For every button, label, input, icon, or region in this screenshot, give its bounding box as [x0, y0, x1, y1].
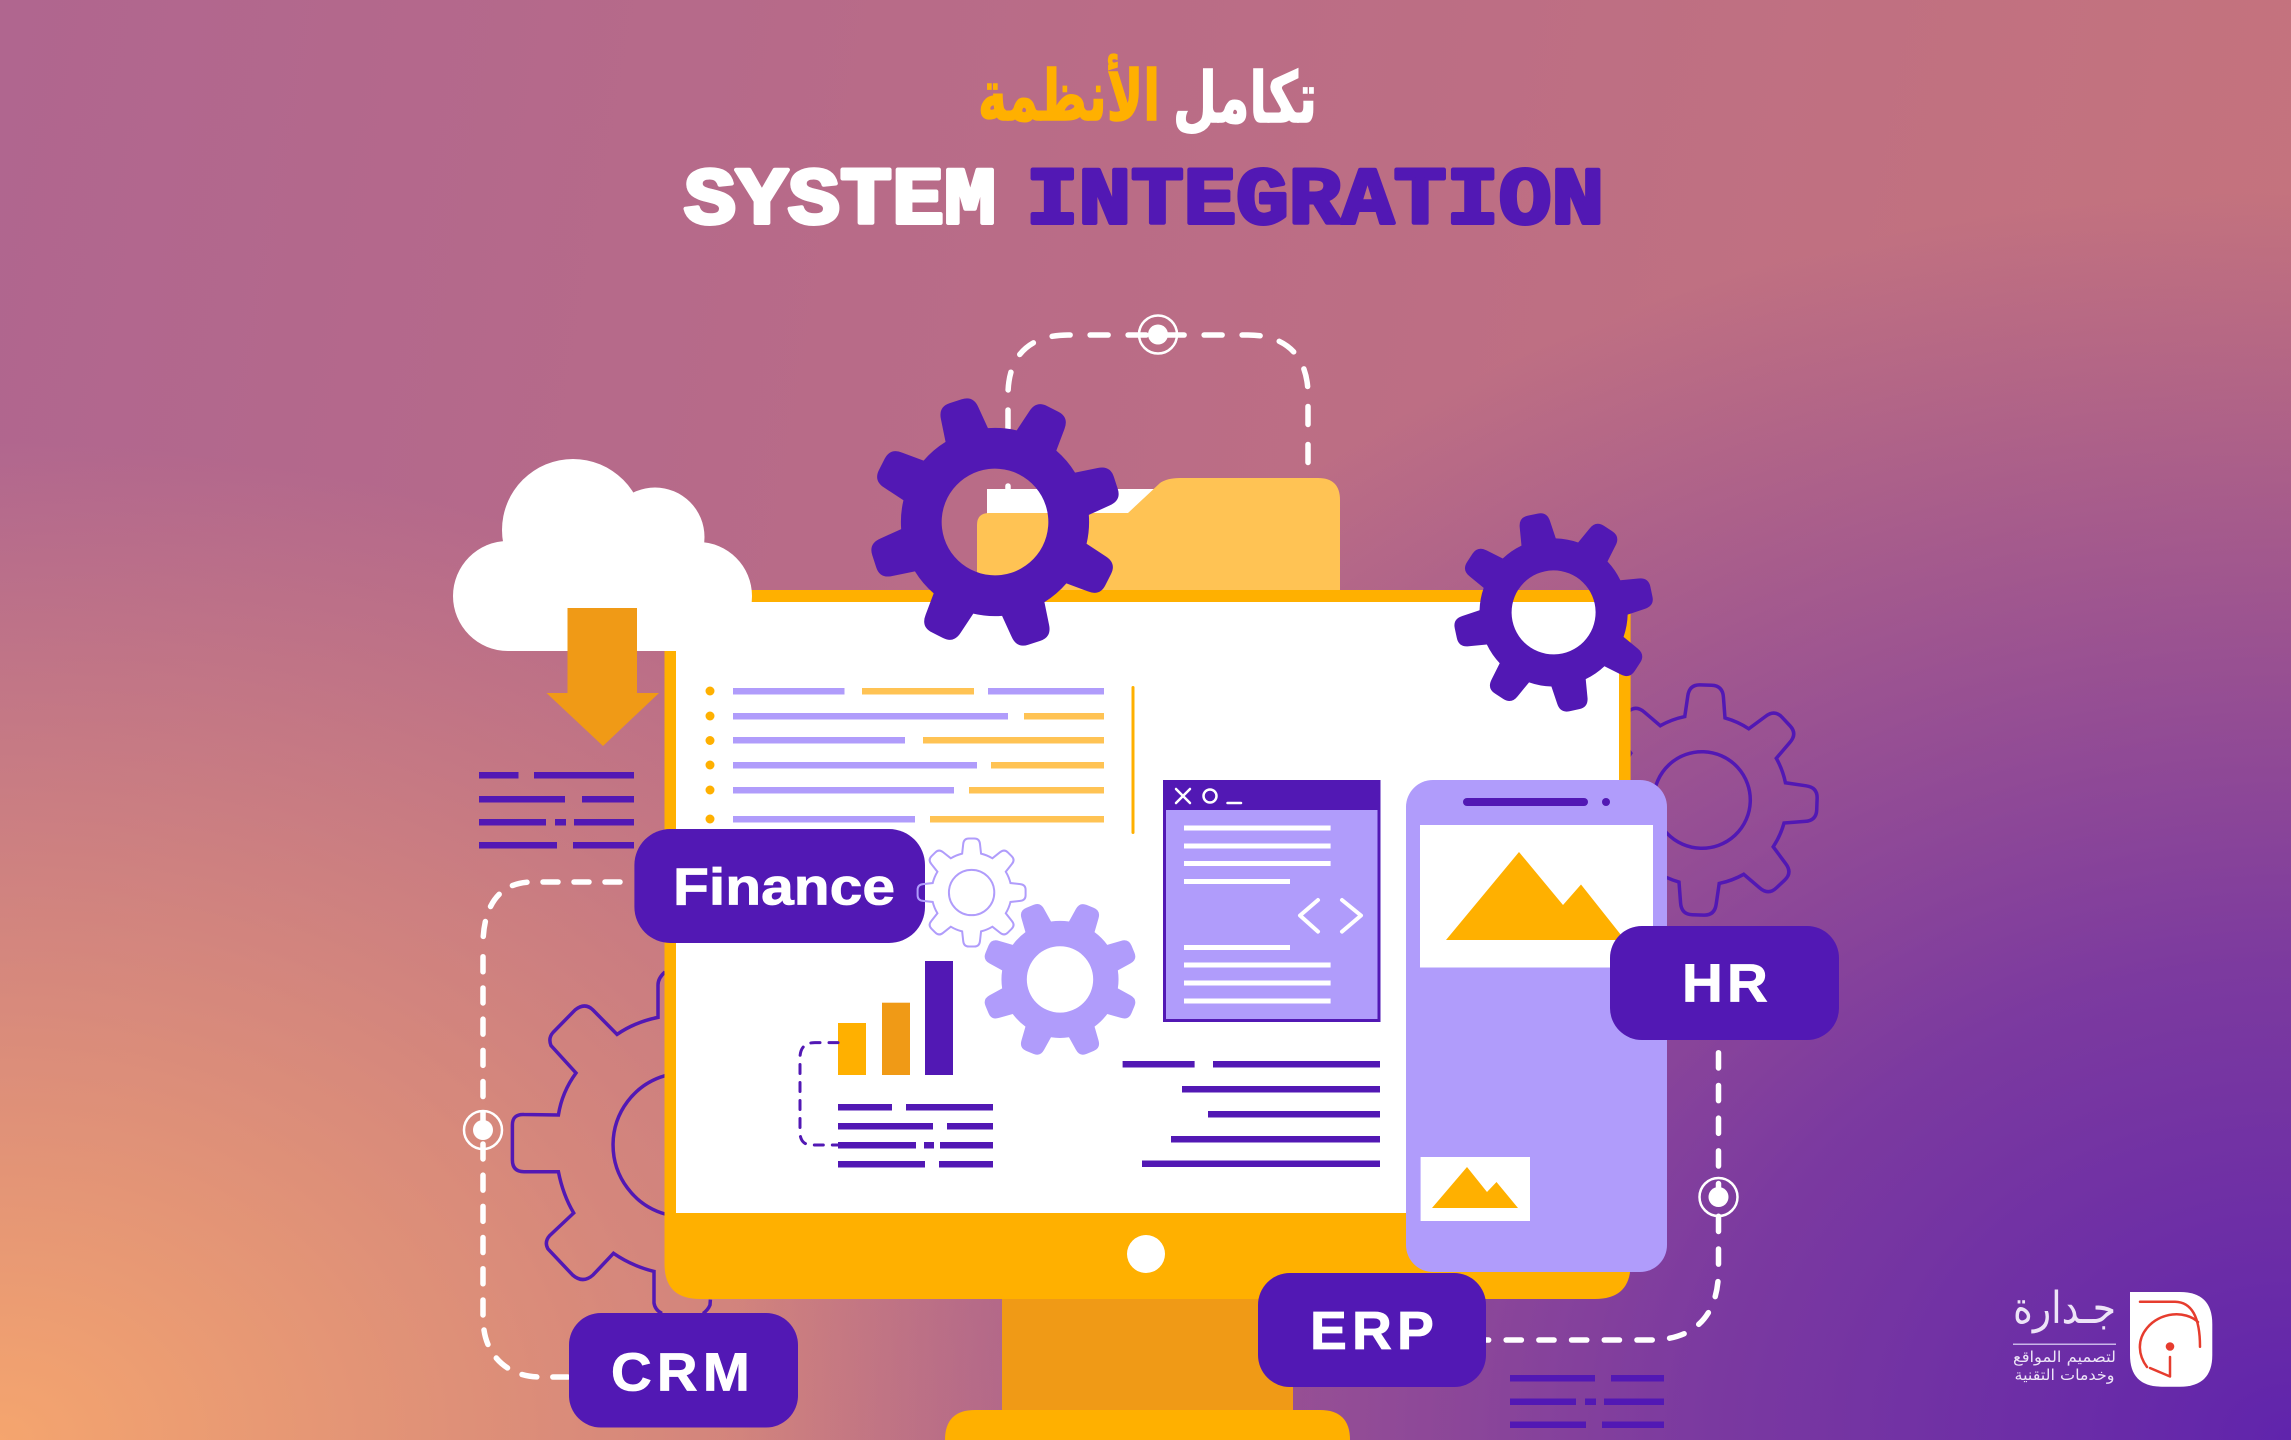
connector node: right: [1700, 1178, 1738, 1216]
logo mark: [2130, 1292, 2212, 1387]
download arrow: [546, 608, 659, 746]
bar chart: [800, 961, 993, 1168]
cloud: [453, 459, 752, 651]
label: CRM: [569, 1313, 798, 1428]
label: Finance: Finance: [673, 858, 895, 916]
english title: [684, 157, 1604, 248]
phone camera: [1602, 798, 1610, 806]
logo text: لتصميم المواقع: [2013, 1348, 2116, 1366]
dashed connector: hr to erp: [1486, 1053, 1718, 1340]
icon: outline gear left: [512, 972, 710, 1314]
dashed connector: top: [1008, 335, 1308, 489]
label: ERP: [1258, 1273, 1486, 1387]
bottom right text lines: [1510, 1375, 1664, 1428]
folder: [977, 478, 1340, 590]
phone small image: [1421, 1157, 1530, 1221]
monitor button: [1127, 1235, 1165, 1273]
title: [684, 54, 1604, 248]
phone speaker: [1463, 798, 1588, 806]
code window: [1163, 780, 1380, 1020]
dashed connector: finance to crm: [483, 882, 620, 1377]
label: HR: HR: [1682, 954, 1772, 1014]
english title: INTEGRATION: [1026, 157, 1604, 248]
logo text: [2013, 1283, 2116, 1384]
label: Finance: [634, 829, 925, 943]
label: ERP: ERP: [1310, 1301, 1439, 1361]
monitor: [664, 590, 1631, 1299]
arabic title: تكامل: [1173, 57, 1317, 139]
icon: lavender gear: [957, 876, 1163, 1083]
monitor stand: [945, 1295, 1350, 1440]
connector node: left: [464, 1111, 502, 1149]
arabic title: الأنظمة: [978, 54, 1160, 137]
icon: large gear: [824, 351, 1166, 693]
left text lines: [479, 772, 634, 848]
label: CRM: CRM: [611, 1343, 755, 1403]
icon: outline gear small: [918, 838, 1026, 946]
logo text: وخدمات التقنية: [2014, 1366, 2114, 1384]
english title: SYSTEM: [684, 157, 996, 248]
right text lines: [1123, 1061, 1380, 1167]
document list: [706, 686, 1134, 834]
icon: upper right gear: [1415, 474, 1692, 751]
logo text: جـدارة: [2013, 1283, 2116, 1334]
phone: [1406, 780, 1667, 1272]
phone main image: [1420, 825, 1653, 968]
label: HR: [1610, 926, 1839, 1040]
icon: outline gear right: [1583, 681, 1821, 919]
logo: [2013, 1283, 2212, 1387]
connector node: top: [1139, 316, 1177, 354]
